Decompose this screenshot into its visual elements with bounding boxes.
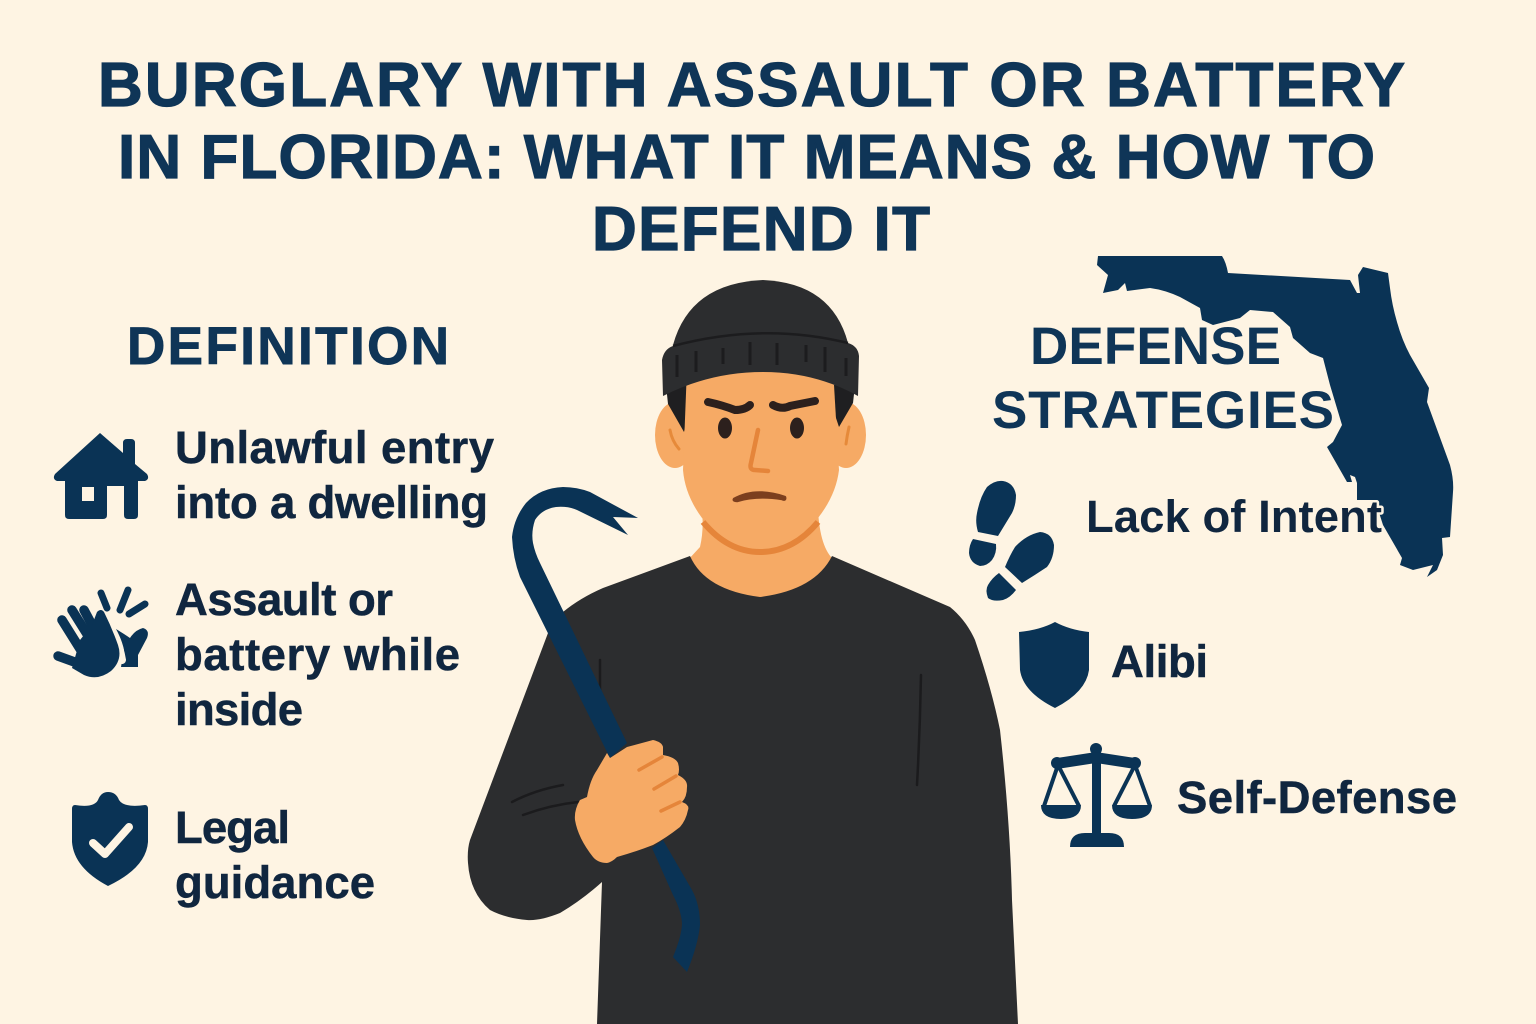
text: assault or battery: Assault or	[175, 574, 393, 625]
text: alibi: Alibi	[1111, 636, 1208, 687]
icon: shield with check	[72, 792, 148, 886]
icon: scales of justice	[1041, 743, 1152, 847]
face	[683, 368, 839, 547]
jaw line	[703, 522, 818, 552]
text: legal guidance: Legal	[175, 802, 290, 853]
text: assault or battery	[175, 574, 460, 735]
text: self-defense: Self-Defense	[1177, 772, 1457, 823]
hair	[666, 385, 855, 432]
heading: defense strategies: STRATEGIES	[992, 381, 1334, 440]
heading: defense strategies	[992, 317, 1334, 440]
text: unlawful entry: into a dwelling	[175, 477, 488, 528]
text: lack of intent: Lack of Intent	[1086, 491, 1382, 542]
panel: defense strategies	[969, 317, 1457, 847]
sweater body	[468, 556, 1018, 1024]
beanie	[662, 280, 859, 396]
icon: shield	[1019, 622, 1089, 708]
text: unlawful entry: Unlawful entry	[175, 422, 495, 473]
title: DEFEND IT	[592, 195, 930, 264]
icon: footprints	[969, 481, 1054, 601]
icon: clapping hands	[58, 590, 148, 677]
text: unlawful entry	[175, 422, 495, 528]
heading: defense strategies: DEFENSE	[1030, 317, 1281, 376]
neck	[688, 510, 834, 600]
panel: definition	[54, 317, 495, 908]
nose	[750, 430, 768, 471]
illustration: burglar with crowbar	[468, 280, 1018, 1024]
title: BURGLARY WITH ASSAULT OR BATTERY	[98, 51, 1405, 120]
crowbar	[512, 487, 700, 972]
sweater folds	[512, 660, 921, 815]
icon: map of Florida	[1097, 256, 1453, 577]
heading: definition: DEFINITION	[127, 317, 449, 376]
hand	[575, 740, 688, 863]
title: IN FLORIDA: WHAT IT MEANS & HOW TO	[118, 123, 1375, 192]
title	[98, 51, 1405, 264]
text: assault or battery: battery while	[175, 629, 460, 680]
eyes and brows	[708, 401, 815, 438]
icon: house	[54, 433, 148, 519]
text: assault or battery: inside	[175, 684, 303, 735]
ears	[655, 402, 866, 468]
mouth	[734, 492, 785, 501]
text: legal guidance	[175, 802, 375, 908]
text: legal guidance: guidance	[175, 857, 375, 908]
